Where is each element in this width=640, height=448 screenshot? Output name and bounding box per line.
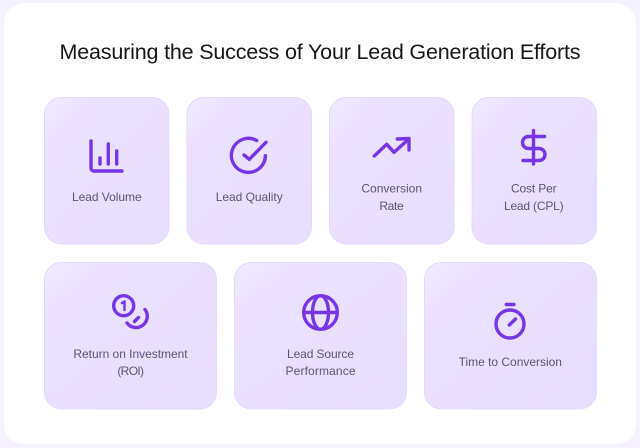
icon: dollar sign [522,130,545,164]
label: Cost Per Lead (CPL): Cost Per [511,182,557,196]
label: Lead Quality: Lead Quality [216,190,283,204]
icon: check circle [231,138,266,172]
card: Time to Conversion [424,262,596,409]
icon: coins [114,296,147,328]
label: Return on Investment (ROI) [73,347,188,378]
label: Conversion Rate: Rate [379,199,404,213]
label: Return on Investment (ROI): Return on Investment [73,347,188,361]
label: Cost Per Lead (CPL) [504,182,564,213]
card: Lead Quality [187,98,312,244]
label: Lead Source Performance: Performance [286,364,356,378]
icon: trend arrow [374,138,409,156]
label: Conversion Rate: Conversion [361,182,422,196]
card: Lead Volume [44,98,169,244]
label: Cost Per Lead (CPL): Lead (CPL) [504,199,564,213]
icon: stopwatch [496,304,524,338]
label: Conversion Rate [361,182,422,213]
card: Conversion Rate [330,98,454,244]
title: Measuring the Success of Your Lead Generation Efforts [60,40,580,64]
card: Cost Per Lead [472,98,596,244]
label: Lead Source Performance [286,347,356,378]
icon: globe [304,296,337,329]
label: Return on Investment (ROI): (ROI) [117,364,144,378]
label: Time to Conversion: Time to Conversion [459,355,562,369]
card: Lead Source Performance [234,262,406,409]
icon: bar chart [91,141,122,171]
label: Lead Volume: Lead Volume [72,190,142,204]
label: Lead Source Performance: Lead Source [287,347,354,361]
card: Return on Investment [44,262,216,409]
